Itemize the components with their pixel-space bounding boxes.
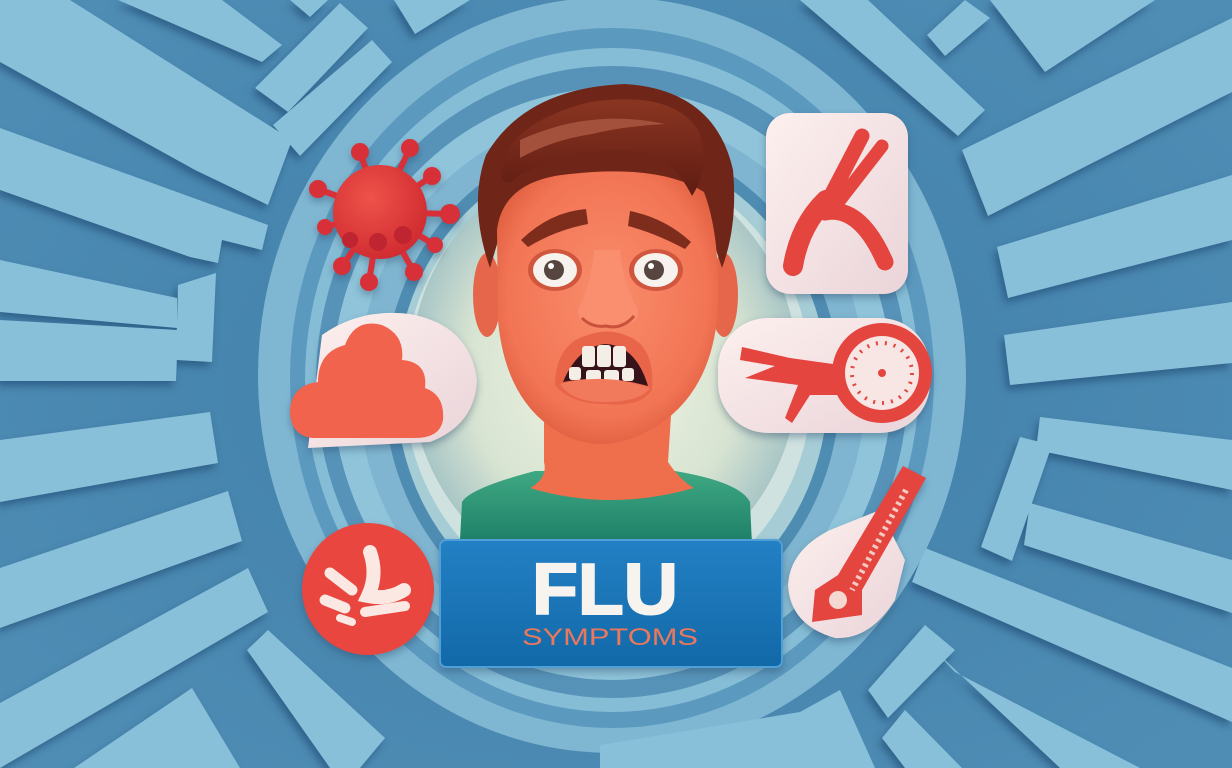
nose: [578, 250, 638, 327]
shirt: [460, 471, 752, 545]
banner title: FLU: [532, 550, 678, 630]
icon: gauge and arm: [718, 318, 932, 433]
teeth: [569, 345, 634, 382]
banner subtitle: SYMPTOMS: [522, 624, 698, 651]
icon: virus: [309, 139, 460, 291]
lower panel under banner: [600, 690, 875, 768]
banner: [440, 540, 782, 667]
icon: red round rash badge: [302, 523, 434, 655]
concentric rings: [258, 0, 966, 753]
mouth opening: [563, 344, 648, 386]
icon: body ache hand: [766, 113, 908, 294]
hair highlight: [520, 119, 665, 158]
hair back: [478, 84, 734, 268]
radiating panels: right: [800, 0, 1232, 768]
lower lip: [560, 379, 650, 402]
person: [460, 84, 752, 545]
face: [497, 171, 718, 444]
radiating panels: left: [0, 0, 470, 768]
icon: cough cloud: [290, 313, 477, 448]
hair fringe: [502, 99, 704, 196]
eyes: [528, 249, 683, 291]
icon: thermometer: [788, 466, 926, 638]
mouth lip: [555, 331, 652, 405]
eyebrows: [521, 209, 588, 247]
neck: [530, 400, 694, 500]
ears: [473, 253, 501, 337]
